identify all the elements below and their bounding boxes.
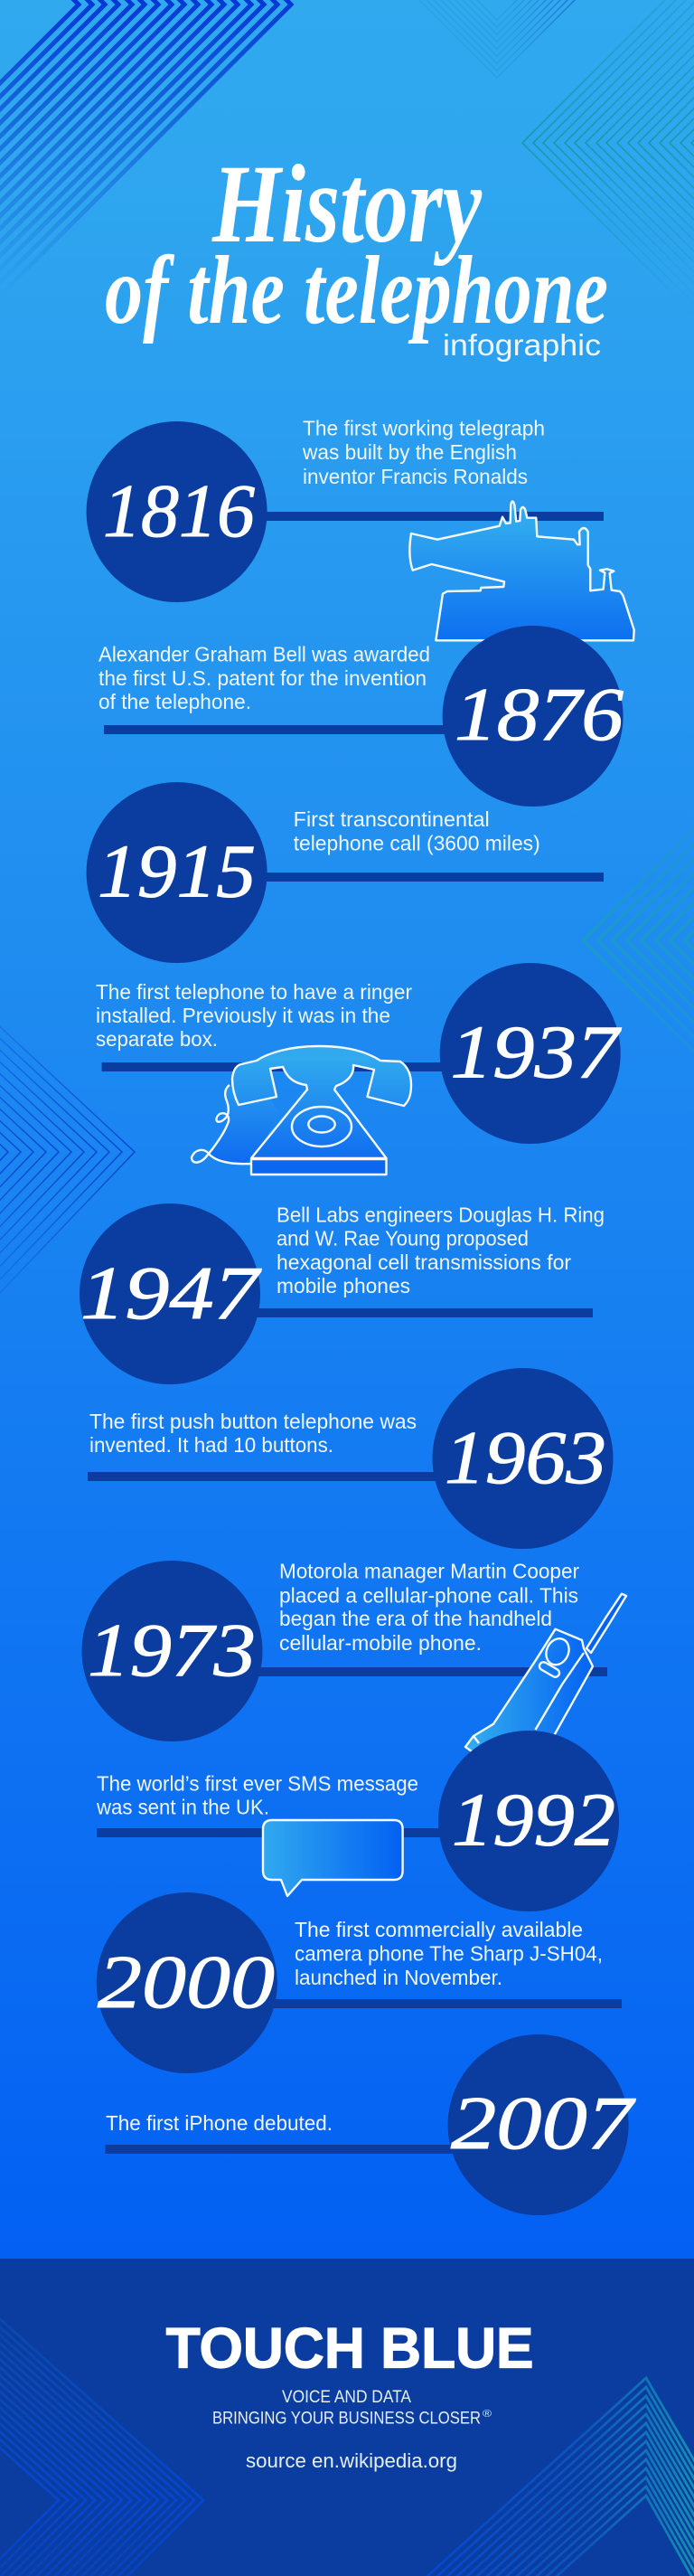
event 1973: placed a cellular-phone call. This [279,1583,578,1607]
footer source: source en.wikipedia.org [246,2449,457,2472]
event 1937: separate box. [96,1027,218,1051]
event 1947: and W. Rae Young proposed [277,1227,529,1250]
icon: handheld mobile phone [465,1594,626,1759]
event 1992: The world’s first ever SMS message [97,1772,418,1796]
event 1876: the first U.S. patent for the invention [98,666,427,690]
event 2000: camera phone The Sharp J-SH04, [295,1941,603,1965]
event 1937 [96,963,622,1144]
event 1992 [96,1731,619,1911]
pattern: middle-right chevrons [584,823,694,1058]
event 1973: cellular-mobile phone. [279,1631,482,1655]
event 1816: inventor Francis Ronalds [303,465,528,488]
event 1992: 1992 [452,1779,615,1863]
event 1963: 1963 [445,1416,606,1500]
event 2007: The first iPhone debuted. [106,2111,333,2135]
icon: rotary telephone [192,1046,411,1175]
footer tagline: ® [483,2409,492,2420]
footer tagline: BRINGING YOUR BUSINESS CLOSER [212,2410,481,2429]
event 1947 [80,1203,605,1384]
icon: chat bubble [263,1820,403,1896]
event 1947: Bell Labs engineers Douglas H. Ring [277,1203,605,1227]
event 1937: installed. Previously it was in the [96,1004,390,1027]
event 1876: of the telephone. [98,690,251,713]
event 1947: 1947 [80,1251,262,1335]
event 1816: 1816 [103,469,255,553]
event 1876: Alexander Graham Bell was awarded [98,643,430,666]
footer brand: TOUCH BLUE [166,2317,534,2380]
event 1992: was sent in the UK. [96,1796,269,1819]
event 2000: launched in November. [295,1966,502,1989]
event 1973: Motorola manager Martin Cooper [279,1560,579,1583]
pattern: footer chevrons [0,2311,694,2576]
event 1915: 1915 [98,830,256,914]
event 1915 [87,782,604,963]
event 1816 [87,417,604,602]
event 1876 [98,626,624,807]
event 1937: The first telephone to have a ringer [96,980,412,1004]
event 2000 [97,1892,622,2073]
title [105,142,608,362]
event 1915: telephone call (3600 miles) [294,832,540,855]
event 1947: hexagonal cell transmissions for [277,1250,571,1274]
pattern: top-left chevrons [0,0,291,391]
event 1937: 1937 [450,1011,622,1095]
pattern: top-right chevrons [522,0,694,318]
event 1973: 1973 [88,1609,256,1693]
event 1915: First transcontinental [294,807,490,831]
footer tagline [212,2388,492,2429]
event 1816: The first working telegraph [303,417,545,440]
event 1947: mobile phones [277,1274,410,1297]
panel: footer [0,2259,694,2576]
event 1816: was built by the English [302,440,517,464]
title: infographic [443,328,601,362]
event 2000: 2000 [98,1940,275,2024]
event 1973 [81,1560,607,1741]
pattern: middle-left chevrons [0,1022,135,1298]
event 1963 [88,1368,613,1549]
title: History [211,142,483,266]
icon: telegraph machine [409,501,634,640]
footer tagline: VOICE AND DATA [282,2388,411,2407]
event 1963: invented. It had 10 buttons. [89,1433,333,1457]
event 1973: began the era of the handheld [279,1607,552,1630]
event 1876: 1876 [455,673,624,757]
event 2007: 2007 [451,2081,636,2166]
event 2007 [105,2034,636,2215]
pattern: top-centre chevrons [416,0,578,78]
event 2000: The first commercially available [295,1918,583,1941]
event 1963: The first push button telephone was [89,1410,417,1433]
